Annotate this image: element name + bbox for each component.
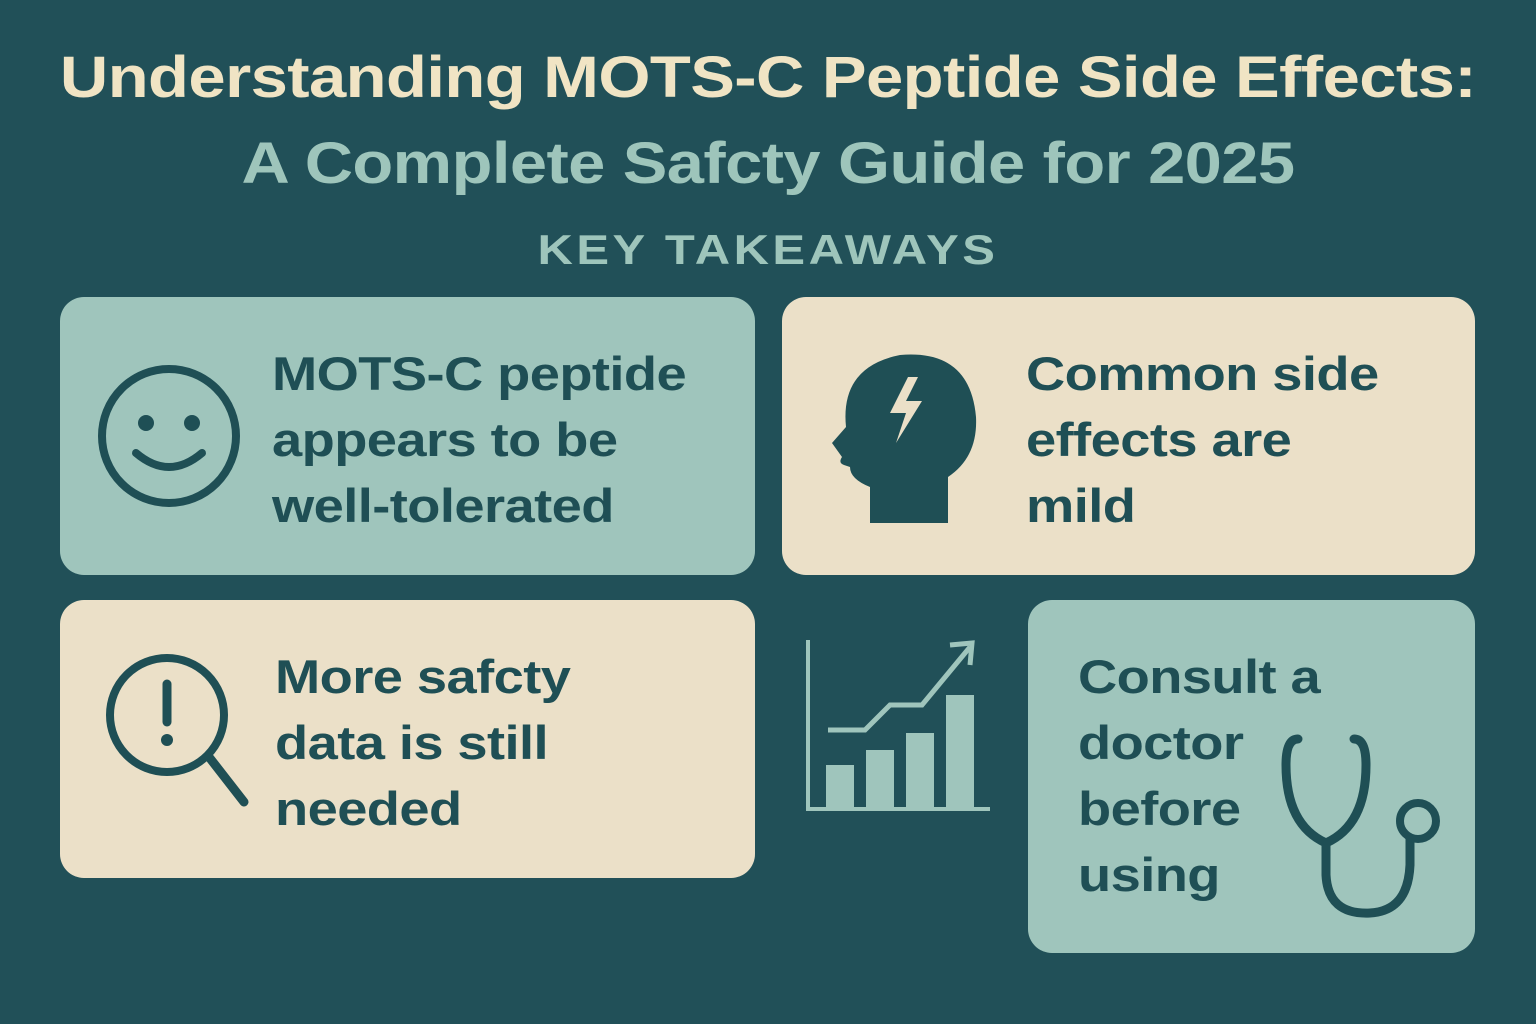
text: before [1078, 782, 1240, 835]
panel: mild side effects [782, 297, 1475, 575]
icon: stethoscope [1282, 734, 1440, 918]
text: Common side [1026, 347, 1379, 400]
icon: magnifier exclamation [106, 654, 248, 806]
text: Consult a [1078, 650, 1320, 703]
text: using [1078, 848, 1220, 901]
text [275, 650, 571, 835]
subtitle: A Complete Safcty Guide for 2025 [241, 131, 1295, 196]
text: data is still [275, 716, 548, 769]
text: well-tolerated [272, 479, 614, 532]
title: Understanding MOTS-C Peptide Side Effects: [60, 45, 1476, 110]
icon: head with bolt [832, 354, 976, 523]
icon: smiley [98, 365, 240, 507]
text [1078, 650, 1321, 901]
text: mild [1026, 479, 1135, 532]
text [272, 347, 686, 532]
chart: rising bars [806, 640, 990, 811]
text: needed [275, 782, 462, 835]
text: appears to be [272, 413, 617, 466]
text: More safcty [275, 650, 570, 703]
panel: more safety data [60, 600, 755, 878]
text: doctor [1078, 716, 1243, 769]
text: effects are [1026, 413, 1291, 466]
text: MOTS-C peptide [272, 347, 686, 400]
text [1026, 347, 1379, 532]
panel: well-tolerated [60, 297, 755, 575]
panel: consult doctor [1028, 600, 1475, 953]
heading: key takeaways: KEY TAKEAWAYS [538, 226, 998, 273]
